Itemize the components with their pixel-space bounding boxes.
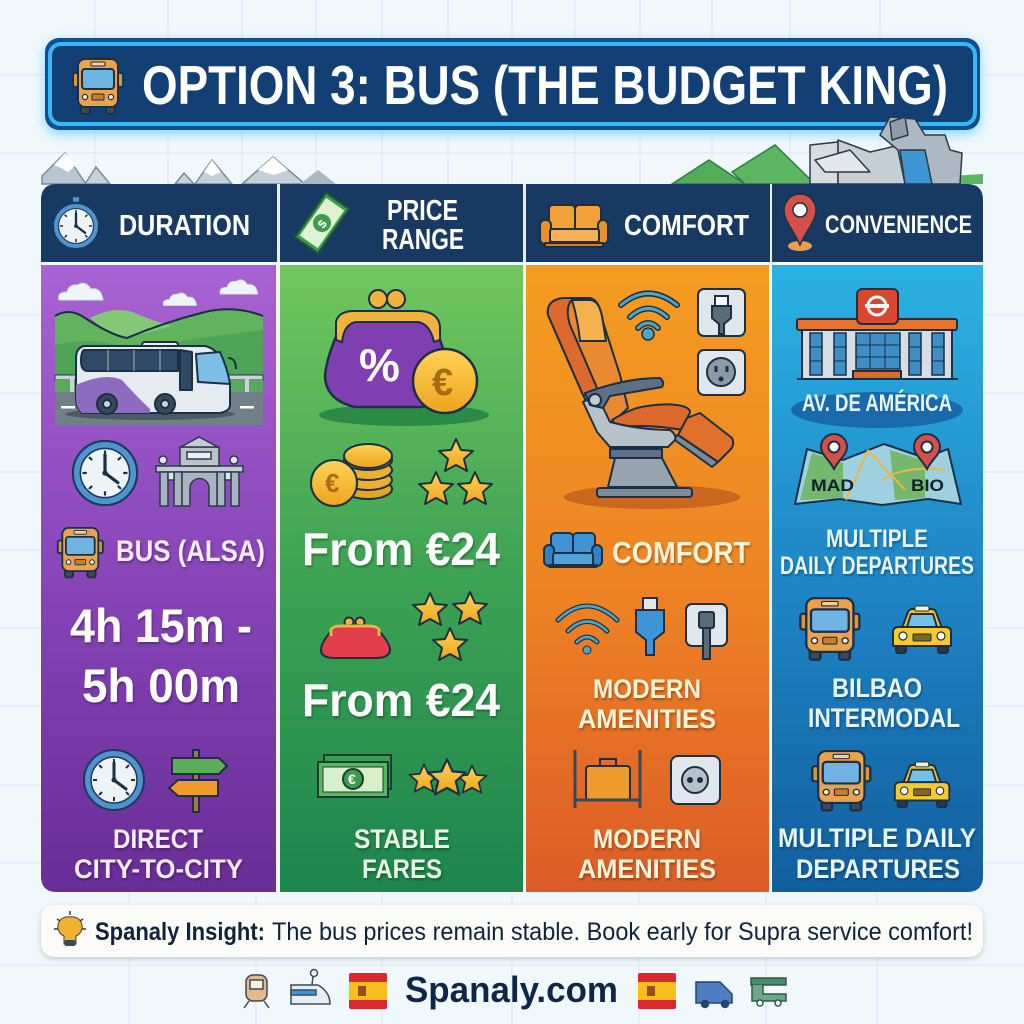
- icon: train: [244, 975, 269, 1008]
- heading: price range: [382, 195, 464, 256]
- icon: purple coin purse with percent: %: [359, 339, 400, 391]
- icon: banknotes: €: [348, 771, 356, 787]
- icon: Puerta de Alcala gate: [156, 437, 243, 506]
- icon: banknotes: [318, 755, 391, 797]
- label: multiple daily departures: MULTIPLE: [826, 525, 928, 553]
- label: multiple daily departures: MULTIPLE DAILY: [778, 823, 976, 853]
- label: modern amenities: [578, 824, 716, 884]
- label: multiple daily departures: [778, 823, 976, 884]
- icon: purple coin purse with percent: [319, 290, 489, 426]
- icon: wifi: [621, 294, 677, 340]
- price: from 24 euro: From €24: [302, 523, 500, 575]
- insight callout: [41, 905, 983, 957]
- icon: taxi: [893, 606, 951, 653]
- label: modern amenities: MODERN: [593, 824, 701, 854]
- label: av. de america: AV. DE AMÉRICA: [802, 389, 952, 417]
- bus: [76, 342, 236, 414]
- heading: price range: RANGE: [382, 224, 464, 256]
- panel: comfort: [526, 265, 769, 892]
- icon: stopwatch: [53, 196, 99, 249]
- label: multiple daily departures: DEPARTURES: [796, 854, 960, 884]
- icon: wifi small: [558, 606, 617, 654]
- label: modern amenities: [578, 674, 716, 734]
- stat: trip duration: [70, 599, 252, 712]
- label: direct city-to-city: CITY-TO-CITY: [74, 854, 243, 884]
- icon: signpost: [169, 750, 227, 812]
- icon: location pin: [784, 194, 816, 251]
- panel: price range: [280, 265, 523, 892]
- icon: Guggenheim museum: [810, 117, 962, 184]
- insight text: The bus prices remain stable. Book early for Supra service comfort!: [272, 918, 973, 946]
- icon: blue sofa: [544, 533, 602, 566]
- icon: purple coin purse with percent: €: [432, 362, 453, 404]
- icon: coin stack: €: [325, 468, 339, 498]
- heading: comfort: COMFORT: [624, 210, 749, 242]
- label: bilbao intermodal: [808, 673, 960, 733]
- icon: plug tile: [686, 604, 727, 659]
- label: direct city-to-city: [74, 824, 243, 884]
- label: bilbao intermodal: BILBAO: [832, 673, 922, 703]
- label: stable fares: [354, 824, 450, 884]
- column headers: [41, 184, 983, 262]
- icon: clock: [84, 750, 144, 810]
- icon: taxi: [895, 762, 949, 807]
- stat: trip duration: 5h 00m: [82, 659, 240, 712]
- stat: trip duration: 4h 15m -: [70, 599, 252, 652]
- label: multiple daily departures: [780, 525, 974, 580]
- icon: bus front: [800, 598, 859, 660]
- icon: red coin purse: [321, 618, 390, 658]
- icon: green bus: [751, 978, 786, 1006]
- icon: orange sofa: [540, 205, 608, 247]
- icon: banknote: [295, 193, 349, 253]
- illustration: route map: [795, 434, 961, 505]
- mountains: left: [42, 153, 336, 184]
- label: bus (alsa): BUS (ALSA): [116, 535, 265, 568]
- heading: convenience: CONVENIENCE: [825, 211, 972, 239]
- icon: coin stack: [311, 444, 392, 506]
- insight text: Spanaly Insight:: [95, 918, 265, 946]
- label: av. de america: [791, 389, 963, 428]
- icon: bus: [73, 59, 123, 114]
- panel: duration: [41, 265, 276, 892]
- label: modern amenities: AMENITIES: [578, 854, 716, 884]
- icon: usb tile: [698, 289, 745, 336]
- icon: wall outlet tile: [698, 350, 745, 395]
- icon: tram: [291, 970, 330, 1004]
- illustration: route map: MAD: [811, 476, 854, 495]
- label: stable fares: FARES: [362, 854, 442, 884]
- icon: luggage rack: [575, 750, 640, 808]
- price: from 24 euro: From €24: [302, 674, 500, 726]
- illustration: route map: BIO: [911, 476, 944, 495]
- icon: van: [696, 982, 732, 1008]
- label: comfort: COMFORT: [612, 535, 750, 570]
- icon: three stars: [413, 592, 487, 660]
- site name: Spanaly.com: [405, 969, 618, 1010]
- label: bilbao intermodal: INTERMODAL: [808, 703, 960, 733]
- label: modern amenities: MODERN: [593, 674, 701, 704]
- illustration: reclining seat: [548, 298, 740, 509]
- label: direct city-to-city: DIRECT: [113, 824, 203, 854]
- illustration: bus station: [797, 289, 958, 379]
- icon: row of stars: [410, 759, 486, 794]
- label: multiple daily departures: DAILY DEPARTURES: [780, 552, 974, 580]
- icon: clock: [73, 441, 137, 505]
- icon: socket tile: [671, 756, 720, 804]
- icon: bus front: [812, 751, 870, 810]
- illustration: bus on a highway: [55, 309, 263, 425]
- icon: light bulb: [54, 911, 86, 946]
- icon: banknote: $: [315, 217, 330, 231]
- label: modern amenities: AMENITIES: [578, 704, 716, 734]
- heading: duration: DURATION: [119, 210, 250, 242]
- icon: bus front: [58, 528, 103, 577]
- panel: convenience: [772, 265, 983, 892]
- illustration: clouds: [59, 280, 258, 306]
- icon: spanish flag: [349, 973, 387, 1009]
- icon: usb plug: [636, 598, 664, 655]
- mountains: right: [672, 145, 983, 184]
- footer: [244, 969, 786, 1010]
- icon: three stars: [419, 439, 492, 504]
- heading: price range: PRICE: [387, 195, 458, 227]
- label: stable fares: STABLE: [354, 824, 450, 854]
- title banner: [45, 38, 980, 134]
- icon: spanish flag: [638, 973, 676, 1009]
